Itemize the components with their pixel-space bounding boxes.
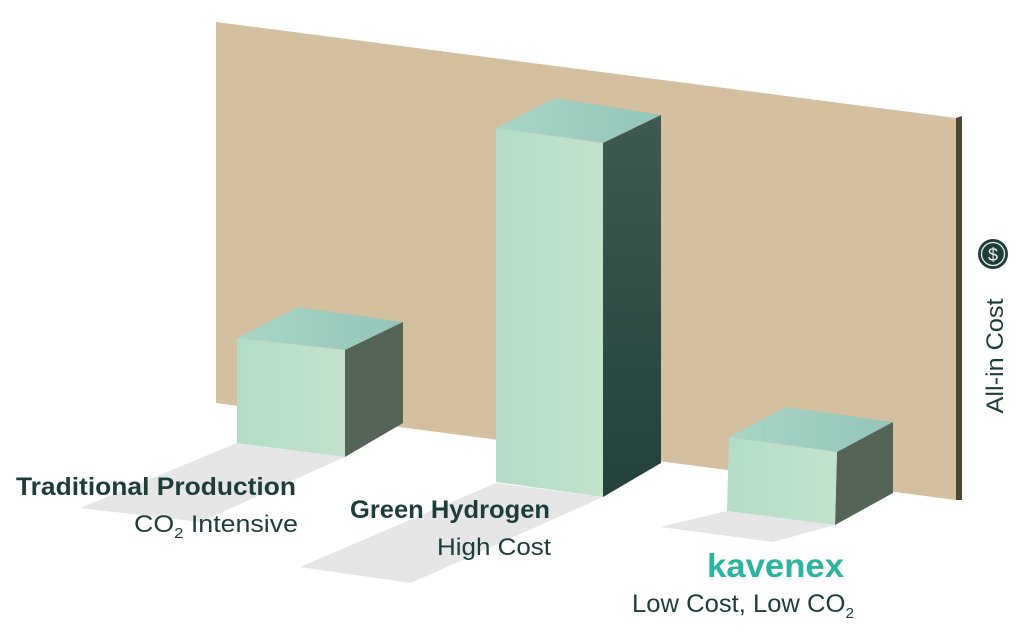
label: kavenex: kavenex bbox=[707, 547, 845, 584]
label: kavenex: 2 bbox=[845, 605, 854, 622]
bar: traditional production bbox=[237, 307, 403, 457]
bar: kavenex bbox=[727, 407, 893, 525]
label: green hydrogen: Green Hydrogen bbox=[350, 496, 550, 524]
label: traditional production: CO bbox=[134, 511, 170, 538]
bar: green hydrogen bbox=[496, 98, 661, 497]
axis label: all-in cost: All-in Cost bbox=[982, 298, 1009, 413]
label: kavenex bbox=[632, 547, 854, 622]
wall bbox=[216, 22, 962, 500]
label: green hydrogen: High Cost bbox=[437, 534, 551, 561]
label: green hydrogen bbox=[350, 496, 551, 561]
label: kavenex: Low Cost, Low CO bbox=[632, 590, 840, 618]
label: traditional production: Intensive bbox=[183, 511, 298, 538]
icon: dollar coin: $ bbox=[988, 245, 998, 265]
label: traditional production: Traditional Production bbox=[16, 473, 296, 501]
shadow: kavenex bbox=[660, 511, 835, 542]
shadow: green hydrogen bbox=[300, 483, 603, 583]
icon: dollar coin bbox=[978, 239, 1008, 269]
shadow: traditional bbox=[80, 443, 345, 522]
label: traditional production bbox=[16, 473, 298, 542]
label: traditional production: 2 bbox=[174, 525, 183, 542]
